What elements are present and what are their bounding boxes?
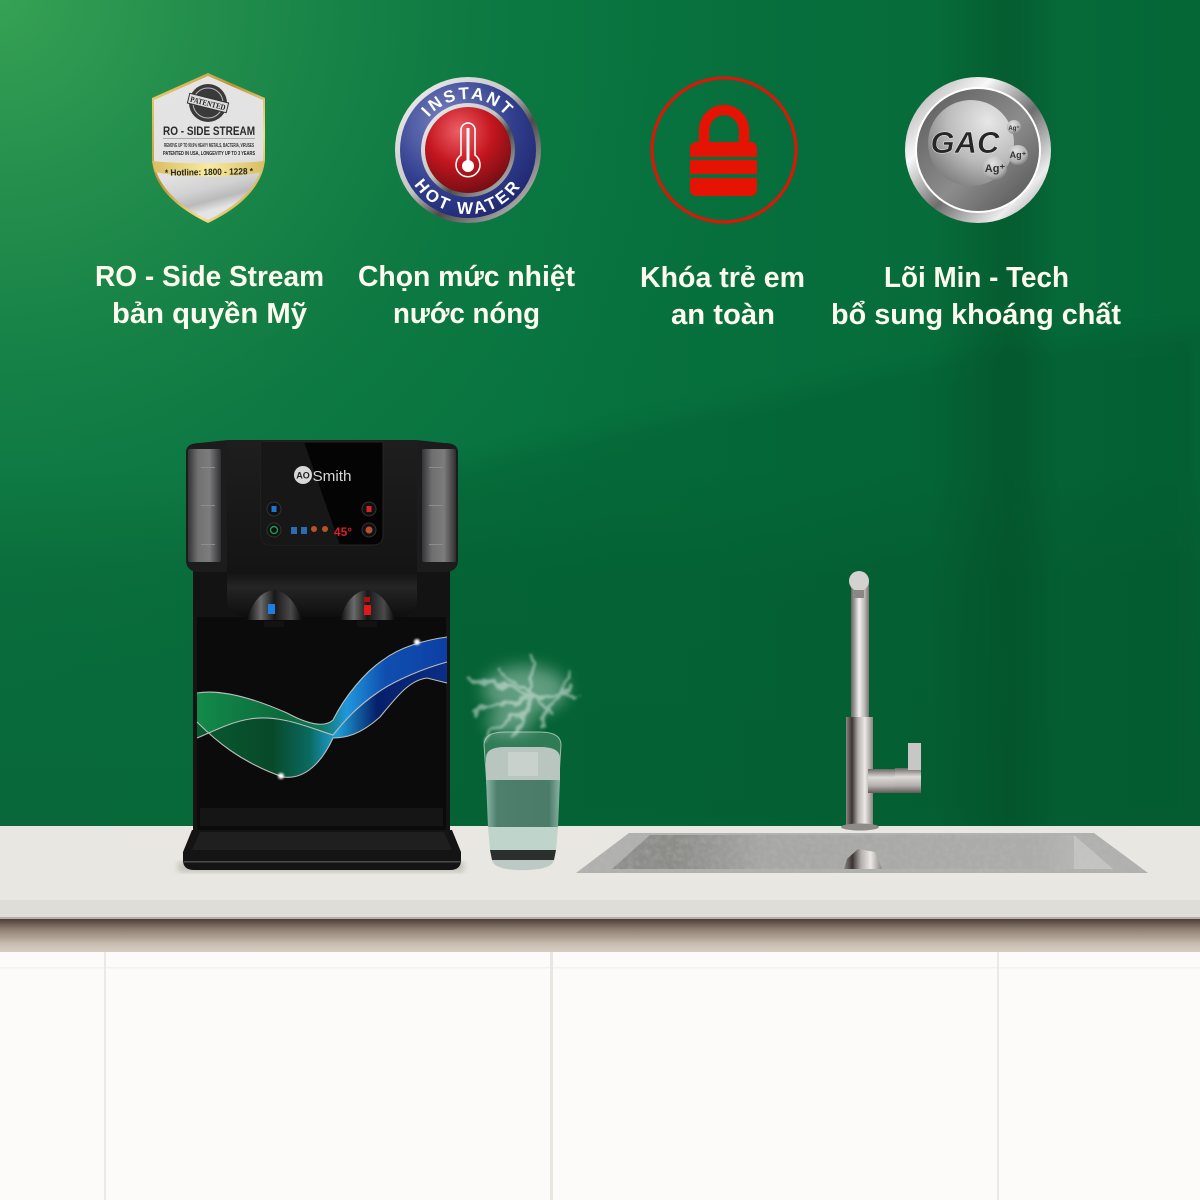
water purifier [178,440,464,872]
glass of hot water [470,655,578,870]
body [193,570,450,832]
head unit [227,440,417,617]
GAC label: GAC [931,125,1000,160]
kitchen counter [0,826,1200,952]
white cabinets [0,952,1200,1200]
drain cover [844,849,882,869]
caption: RO side stream [95,261,324,330]
drip grate [200,808,443,826]
caption: child lock: an toàn [671,299,775,331]
shield heading: RO - SIDE STREAM [163,126,255,138]
caption: mineral core [831,262,1121,331]
silver ions [983,120,1028,180]
hot water text: HOT WATER [414,178,520,214]
hot water tap [340,590,395,627]
caption: mineral core: bổ sung khoáng chất [831,299,1121,331]
icon: child lock [652,78,796,222]
concrete sink [576,833,1148,873]
thermometer [456,123,480,177]
patented stamp [187,84,229,122]
caption: RO side stream: RO - Side Stream [95,261,324,293]
icon: instant hot water badge [395,77,541,223]
caption: mineral core: Lõi Min - Tech [884,262,1069,294]
icon: GAC mineral core [905,77,1051,223]
silver ions: Ag⁺ [1008,125,1020,132]
wave ribbon decoration [197,637,447,779]
left silver column [186,440,228,572]
shield small print: REMOVE UP TO 99.9% HEAVY METALS, BACTERIA, VIRUSES [164,143,254,149]
caption: RO side stream: bản quyền Mỹ [112,298,307,330]
AO Smith logo [294,466,352,485]
hotline: * Hotline: 1800 - 1228 * [165,166,254,178]
shield small print line two: PATENTED IN USA, LONGEVITY UP TO 3 YEARS [163,151,255,157]
cold water tap [247,590,302,627]
silver ions: Ag⁺ [1010,150,1027,160]
base tray [183,830,461,870]
caption: hot water temperature: nước nóng [393,298,540,330]
caption: child lock: Khóa trẻ em [640,262,805,294]
icon: RO side stream shield badge [152,73,265,223]
instant text: INSTANT [420,87,514,117]
right silver column [416,440,458,572]
green wall background [0,0,1200,830]
AO Smith logo: AO [296,470,310,480]
caption: hot water temperature [358,261,575,330]
steam [470,655,578,740]
temperature readout: 45° [334,525,352,539]
AO Smith logo: Smith [312,468,352,485]
caption: hot water temperature: Chọn mức nhiệt [358,261,575,293]
glass body [484,732,561,870]
silver ions: Ag⁺ [985,163,1005,175]
kitchen faucet [841,571,921,830]
patented stamp: PATENTED [189,95,227,112]
control panel [261,442,383,545]
caption: child lock [640,262,805,331]
sink concrete grain [616,835,740,869]
